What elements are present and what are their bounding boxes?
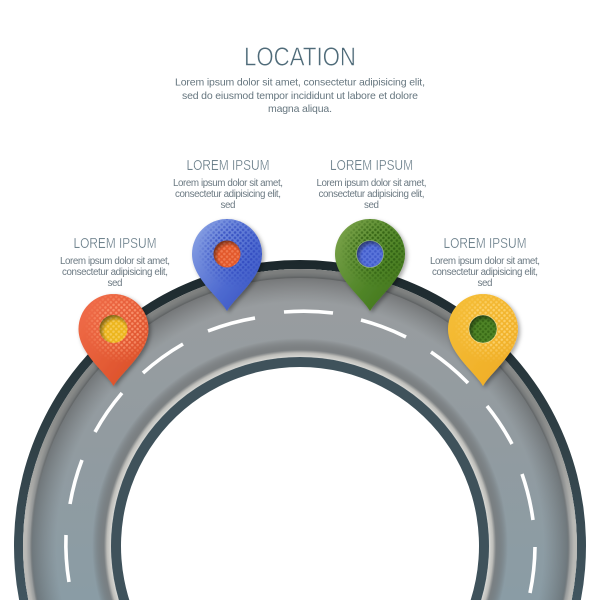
road inner dark edge <box>111 357 489 600</box>
label: yellow pin: LOREM IPSUM <box>444 235 526 252</box>
road surface <box>23 269 577 600</box>
pin: red <box>78 294 148 386</box>
label: green pin: consectetur adipisicing elit, <box>318 189 424 200</box>
label: red pin <box>60 235 170 289</box>
label: blue pin: Lorem ipsum dolor sit amet, <box>173 178 283 189</box>
label: blue pin: LOREM IPSUM <box>186 157 270 174</box>
label: yellow pin: consectetur adipisicing elit, <box>432 267 538 278</box>
label: red pin: LOREM IPSUM <box>74 235 156 252</box>
outer kerb shade <box>23 269 577 600</box>
label: red pin: sed <box>108 278 122 289</box>
label: green pin: sed <box>364 200 379 211</box>
label: yellow pin: Lorem ipsum dolor sit amet, <box>430 256 540 267</box>
label: red pin: Lorem ipsum dolor sit amet, <box>60 256 170 267</box>
pin: yellow <box>448 294 518 386</box>
intro text: magna aliqua. <box>268 103 332 115</box>
label: blue pin: sed <box>220 200 236 211</box>
intro text: sed do eiusmod tempor incididunt ut labore et dolore <box>182 90 418 102</box>
road centre dashes <box>66 311 535 593</box>
label: red pin: consectetur adipisicing elit, <box>62 267 168 278</box>
label: green pin: Lorem ipsum dolor sit amet, <box>316 178 426 189</box>
intro text: Lorem ipsum dolor sit amet, consectetur adipisicing elit, <box>175 76 425 88</box>
title: LOCATION <box>244 44 356 72</box>
label: blue pin <box>173 157 283 211</box>
label: blue pin: consectetur adipisicing elit, <box>175 189 281 200</box>
label: yellow pin: sed <box>478 278 492 289</box>
label: yellow pin <box>430 235 540 289</box>
road ring <box>14 260 586 600</box>
pin: green <box>335 219 405 311</box>
road outer dark edge <box>14 260 586 600</box>
label: green pin: LOREM IPSUM <box>330 157 413 174</box>
intro text <box>175 76 425 115</box>
pin: blue <box>192 219 262 311</box>
label: green pin <box>316 157 426 211</box>
road edge shading and kerbs <box>23 269 577 600</box>
